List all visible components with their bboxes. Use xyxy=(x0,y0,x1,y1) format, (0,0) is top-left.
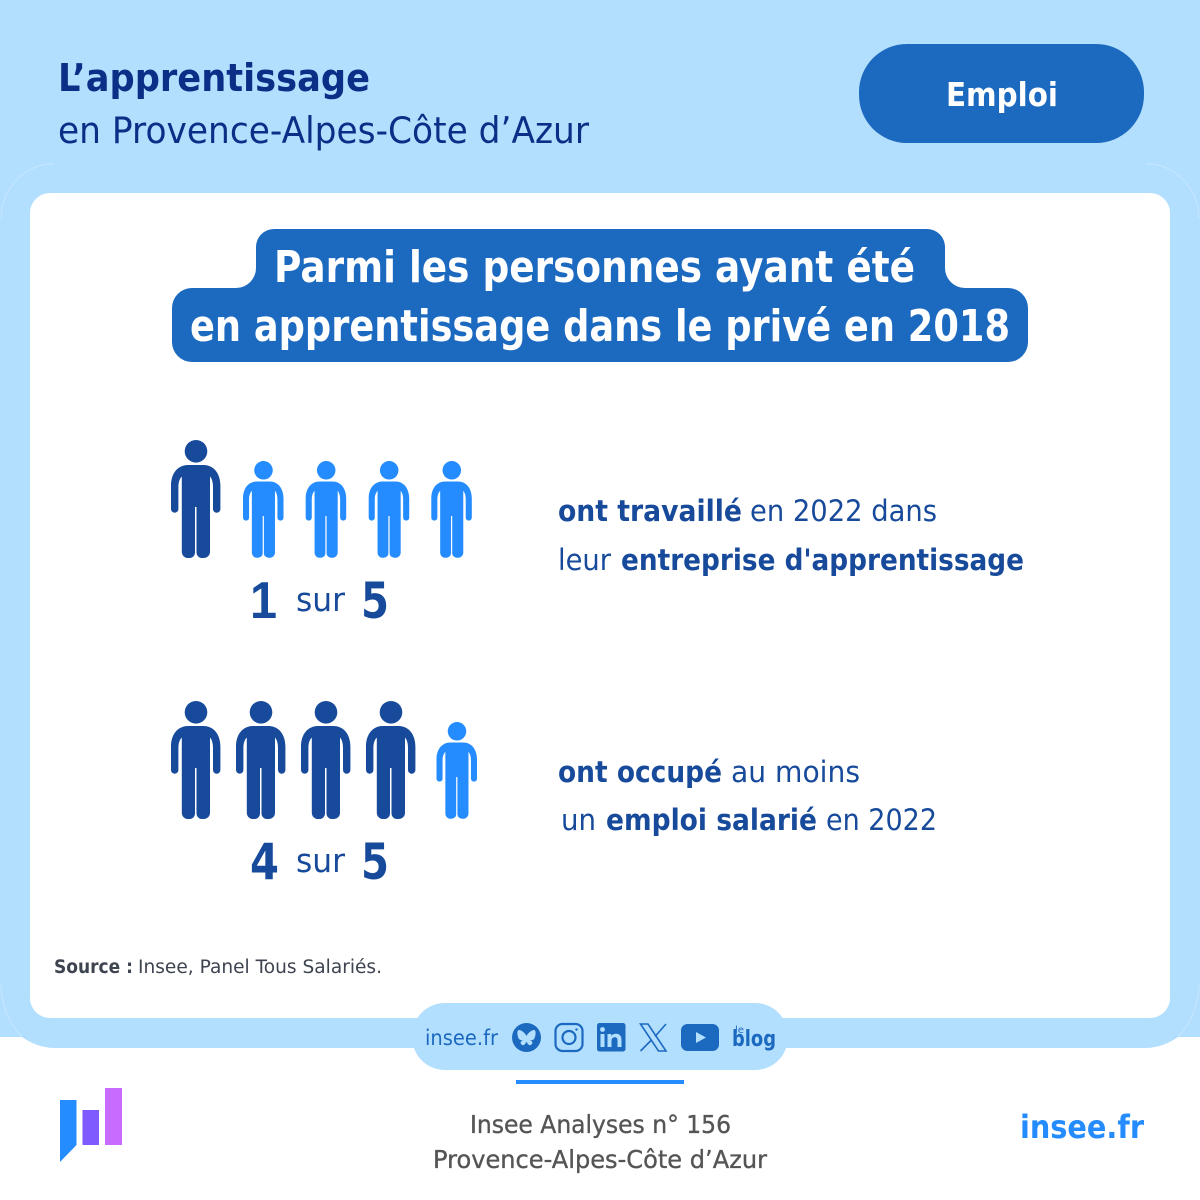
ratio: 4 sur 5: 5 xyxy=(361,833,389,891)
faint corner arcs xyxy=(1,164,1199,1037)
statement: employment: au moins xyxy=(731,755,860,789)
statement: employment: un xyxy=(561,803,596,837)
publication reference: Provence-Alpes-Côte d’Azur xyxy=(433,1145,768,1174)
pictogram row: 1 of 5 xyxy=(171,440,472,558)
pictogram row: 4 of 5 xyxy=(171,701,477,819)
source: Source : xyxy=(54,957,133,978)
heading banner: en apprentissage dans le privé en 2018 xyxy=(190,301,1010,352)
icon: linkedin xyxy=(597,1023,626,1052)
ratio: 1 sur 5: sur xyxy=(296,580,345,619)
divider bar xyxy=(516,1080,684,1084)
statement: company: en 2022 dans xyxy=(750,494,937,528)
site link: insee.fr xyxy=(425,1026,498,1050)
icon: bluesky xyxy=(512,1023,541,1052)
icon: instagram xyxy=(556,1024,582,1051)
ratio: 1 sur 5: 1 xyxy=(250,572,277,630)
source: Insee, Panel Tous Salariés. xyxy=(138,957,382,978)
ratio: 4 sur 5: sur xyxy=(296,841,345,880)
publication reference xyxy=(433,1110,768,1174)
ratio: 1 sur 5: 5 xyxy=(361,572,389,630)
heading banner xyxy=(172,229,1028,362)
icon: youtube xyxy=(681,1024,719,1051)
statement: employment: emploi salarié xyxy=(606,803,817,837)
icon: X xyxy=(640,1024,666,1051)
statement: company xyxy=(558,494,1024,577)
ratio: 1 sur 5 xyxy=(250,572,389,630)
category pill: Emploi xyxy=(859,44,1144,143)
statement: employment xyxy=(558,755,937,837)
ratio: 4 sur 5: 4 xyxy=(250,833,279,891)
category pill: Emploi: Emploi xyxy=(946,75,1058,114)
white main panel xyxy=(30,193,1170,1018)
statement: employment: en 2022 xyxy=(826,803,937,837)
icon: le blog: blog xyxy=(732,1027,776,1052)
statement: company: leur xyxy=(558,543,611,577)
statement: company: entreprise d'apprentissage xyxy=(621,543,1024,577)
social links pill xyxy=(412,1003,788,1070)
site name: insee.fr xyxy=(1020,1108,1144,1146)
statement: company: ont travaillé xyxy=(558,494,742,528)
title: en Provence-Alpes-Côte d’Azur xyxy=(58,109,589,152)
ratio: 4 sur 5 xyxy=(250,833,389,891)
heading banner: Parmi les personnes ayant été xyxy=(274,242,915,293)
logo xyxy=(60,1088,122,1162)
icon: le blog: le xyxy=(735,1025,744,1036)
title: L’apprentissage xyxy=(58,56,370,101)
title xyxy=(58,56,589,152)
publication reference: Insee Analyses n° 156 xyxy=(470,1110,731,1139)
statement: employment: ont occupé xyxy=(558,755,722,789)
